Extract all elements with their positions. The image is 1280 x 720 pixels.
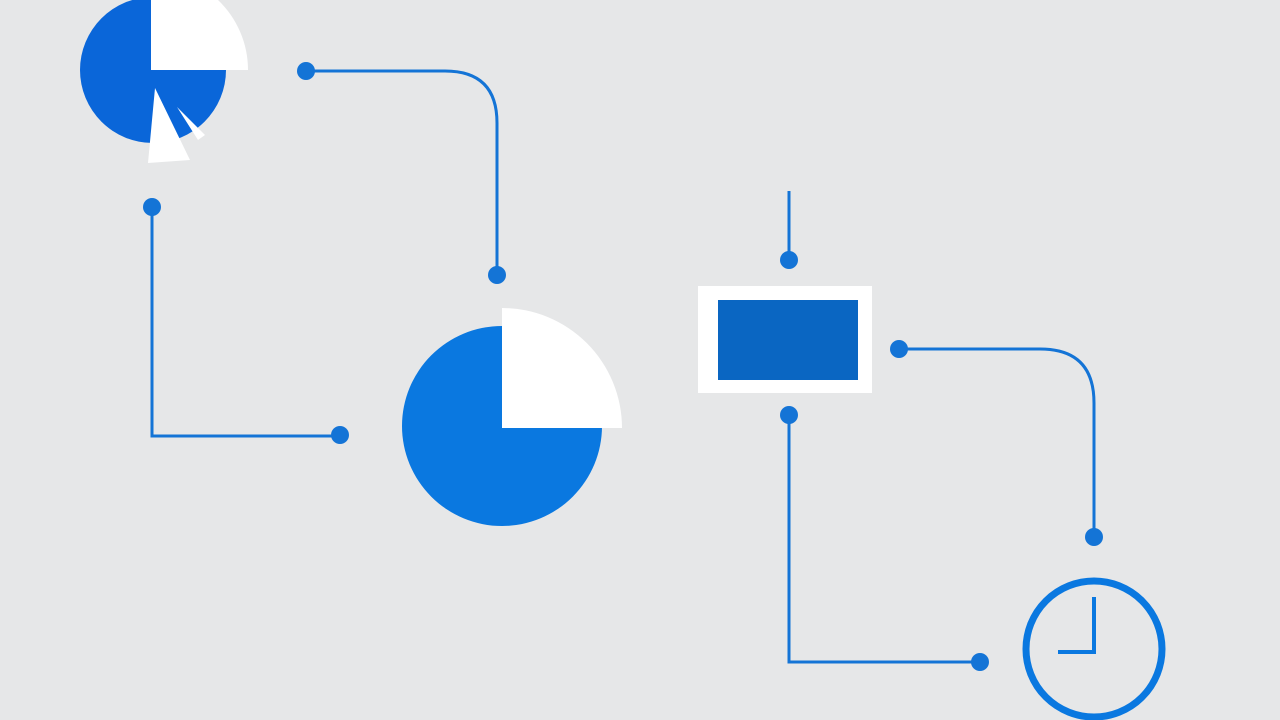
connector: top to rectangle	[780, 191, 798, 269]
icon: small pie chart	[80, 0, 248, 163]
connector: rectangle to clock (right)	[890, 340, 1103, 546]
connector: rectangle to clock (bottom)	[780, 406, 989, 671]
connector: left L-line	[143, 198, 349, 444]
icon: rectangle	[698, 286, 872, 393]
icon: clock	[1026, 581, 1162, 717]
connector: small pie to large pie	[297, 62, 506, 284]
icon: large pie chart	[402, 308, 622, 526]
